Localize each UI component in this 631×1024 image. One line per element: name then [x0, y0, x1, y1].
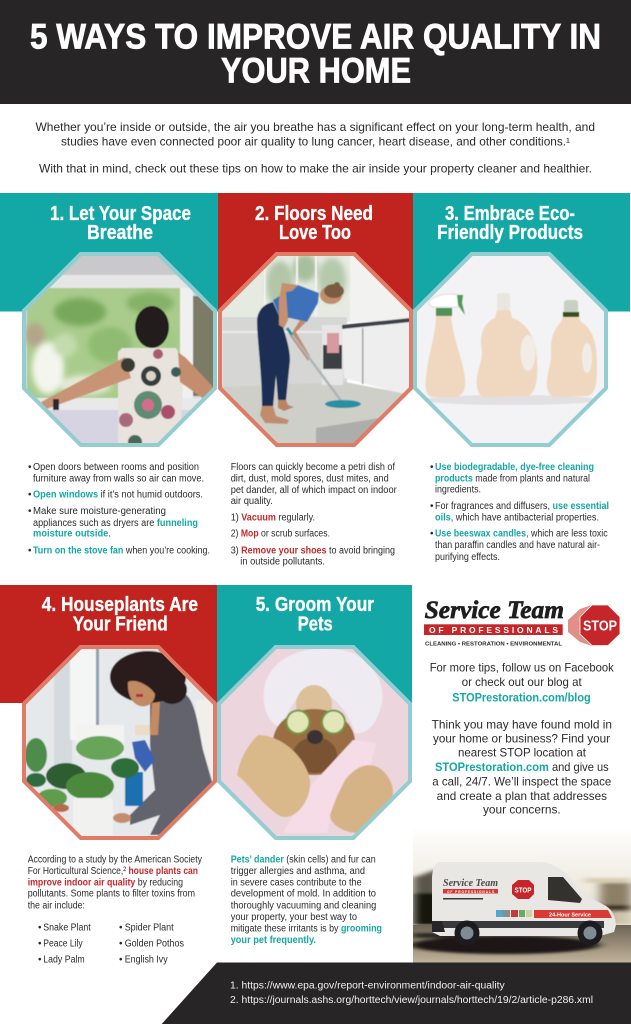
text: tip 4 houseplants: the air include:	[28, 901, 85, 912]
text: tip 1 bullets: •	[28, 506, 32, 517]
text: call to action: or check out our blog at	[462, 676, 582, 689]
photo: eco-friendly bottles	[413, 252, 608, 447]
text: tip 3 bullets: •	[430, 529, 434, 540]
intro text: With that in mind, check out these tips on how to make the air inside your property cleaner and healthier.	[39, 163, 592, 176]
heading: tip 5: 5. Groom Your	[256, 594, 374, 616]
text: call to action: STOPrestoration.com/blog	[452, 692, 591, 705]
van body: Service Team	[443, 878, 498, 889]
text: tip 2 steps: pet dander, all of which impact on indoor	[231, 485, 397, 496]
plant list: Peace Lily	[43, 939, 83, 950]
title banner	[0, 0, 631, 104]
plant list: •	[38, 955, 42, 966]
panel: tip 3 embrace eco-friendly products	[413, 193, 630, 312]
text: tip 1 bullets: •	[28, 490, 32, 501]
heading: tip 1: 1. Let Your Space	[50, 203, 191, 225]
intro text: Whether you’re inside or outside, the air you breathe has a significant effect on your long-term health, and	[36, 121, 595, 134]
text: tip 5 pets: Pets’ dander (skin cells) and fur can	[231, 855, 376, 866]
text: tip 3 bullets: Use beeswax candles, which are less toxic	[435, 529, 608, 540]
text: tip 5 pets: your pet frequently.	[231, 935, 316, 946]
heading: tip 1: Breathe	[87, 222, 153, 244]
text: tip 1 bullets: Open windows if it’s not humid outdoors.	[33, 490, 203, 501]
text: tip 1 bullets: appliances such as dryers are funneling	[33, 518, 198, 529]
text: tip 1 bullets: furniture away from walls so air can move.	[33, 474, 204, 484]
text: tip 3 bullets: For fragrances and diffusers, use essential	[435, 501, 609, 512]
heading: tip 1	[50, 203, 191, 244]
photo: woman mopping floor	[218, 252, 413, 450]
text: tip 4 houseplants: pollutants. Some plants to filter toxins from	[28, 889, 195, 900]
footer references: 2. https://journals.ashs.org/horttech/view/journals/horttech/19/2/article-p286.xml	[230, 995, 593, 1006]
text: tip 4 houseplants	[28, 855, 202, 966]
text: tip 1 bullets: Open doors between rooms and position	[33, 462, 199, 473]
panel: tip 4 houseplants	[0, 585, 217, 703]
text: tip 5 pets: thoroughly vacuuming and cleaning	[231, 901, 376, 912]
text: tip 1 bullets: moisture outside.	[33, 529, 111, 540]
plant list: Spider Plant	[125, 923, 174, 934]
text: tip 2 steps: 1) Vacuum regularly.	[231, 513, 315, 524]
plant list	[38, 923, 184, 966]
plant list: •	[119, 923, 123, 934]
text: tip 3 bullets: Use biodegradable, dye-free cleaning	[435, 462, 594, 473]
text: call to action: Think you may have found mold in	[432, 719, 612, 732]
icon: stop sign	[568, 605, 620, 646]
text: tip 3 bullets: than paraffin candles and have natural air-	[435, 540, 600, 551]
photo: dog with towel and cucumber eye masks	[217, 645, 412, 840]
logo: Service Team of Professionals STOP	[424, 597, 620, 647]
heading: tip 2	[255, 203, 373, 244]
intro text	[36, 121, 595, 176]
text: call to action: your concerns.	[483, 804, 561, 817]
plant list: •	[119, 939, 123, 950]
van body	[432, 862, 616, 946]
text: tip 5 pets: mitigate these irritants is by grooming	[231, 924, 382, 935]
text: call to action: For more tips, follow us on Facebook	[430, 662, 614, 675]
photo: woman opening window	[22, 252, 217, 449]
plant list: •	[38, 939, 42, 950]
text: tip 2 steps: in outside pollutants.	[240, 557, 325, 568]
text: tip 1 bullets	[28, 462, 210, 557]
text: tip 5 pets: trigger allergies and asthma, and	[231, 866, 365, 877]
text: tip 2 steps: Floors can quickly become a petri dish of	[231, 462, 395, 473]
panel: tip 5 groom your pets	[217, 585, 412, 703]
photo: woman watering houseplants	[22, 645, 217, 840]
text: tip 1 bullets: Make sure moisture-generating	[33, 506, 166, 517]
text: tip 5 pets	[231, 855, 382, 946]
plant list: Lady Palm	[43, 955, 85, 966]
heading: tip 4	[42, 594, 198, 636]
text: tip 3 bullets: •	[430, 501, 434, 512]
logo: Service Team of Professionals STOP: Service Team	[425, 597, 564, 624]
van body: 24-Hour Service	[549, 912, 591, 918]
text: tip 5 pets: your property, your best way to	[231, 912, 357, 923]
text: tip 2 steps	[231, 462, 397, 568]
text: tip 5 pets: development of mold. In addition to	[231, 889, 376, 900]
heading: tip 3	[437, 203, 583, 244]
logo: Service Team of Professionals STOP: OF PROFESSIONALS	[429, 625, 558, 635]
heading: tip 2: 2. Floors Need	[255, 203, 373, 225]
text: tip 4 houseplants: For Horticultural Science,² house plants can	[28, 866, 198, 877]
icon: stop sign: STOP	[583, 618, 617, 634]
text: tip 3 bullets: purifying effects.	[435, 552, 500, 563]
text: tip 1 bullets: •	[28, 462, 32, 473]
van body: OF PROFESSIONALS	[447, 890, 494, 894]
text: tip 2 steps: air quality.	[231, 496, 273, 507]
photo: STOP service van	[413, 842, 631, 962]
text: tip 3 bullets: products made from plants and natural	[435, 474, 590, 484]
heading: tip 3: 3. Embrace Eco-	[445, 203, 575, 225]
text: call to action: a call, 24/7. We’ll inspect the space	[432, 776, 611, 789]
footer references	[162, 962, 631, 1024]
text: tip 3 bullets: •	[430, 462, 434, 473]
intro text: studies have even connected poor air quality to lung cancer, heart disease, and other conditions.¹	[61, 136, 570, 149]
text: call to action: your home or business? Find your	[433, 733, 610, 746]
text: tip 2 steps: 2) Mop or scrub surfaces.	[231, 529, 330, 540]
text: call to action: STOPrestoration.com and give us	[435, 761, 609, 774]
logo: Service Team of Professionals STOP: CLEANING • RESTORATION • ENVIRONMENTAL	[425, 641, 563, 647]
text: call to action	[430, 662, 614, 817]
plants	[25, 736, 139, 807]
panel: tip 2 floors need love too	[218, 193, 413, 312]
text: tip 3 bullets: oils, which have antibacterial properties.	[435, 513, 599, 524]
text: call to action: nearest STOP location at	[458, 747, 587, 760]
text: tip 3 bullets: ingredients.	[435, 485, 481, 496]
heading: tip 5	[256, 594, 374, 636]
footer references: 1. https://www.epa.gov/report-environment/indoor-air-quality	[230, 980, 505, 991]
plant list: English Ivy	[125, 955, 168, 966]
heading: tip 5: Pets	[298, 614, 333, 636]
heading: tip 4: 4. Houseplants Are	[42, 594, 198, 616]
text: call to action: and create a plan that addresses	[437, 790, 607, 803]
panel: tip 1 let your space breathe	[0, 193, 218, 312]
title banner: YOUR HOME	[221, 52, 411, 90]
text: tip 1 bullets: Turn on the stove fan when you’re cooking.	[33, 546, 210, 557]
text: tip 4 houseplants: improve indoor air quality by reducing	[28, 878, 183, 889]
heading: tip 4: Your Friend	[73, 614, 168, 636]
text: tip 5 pets: in severe cases contribute to the	[231, 878, 362, 889]
heading: tip 3: Friendly Products	[437, 222, 583, 244]
text: tip 3 bullets	[430, 462, 609, 563]
plant list: Snake Plant	[43, 923, 91, 934]
heading: tip 2: Love Too	[279, 222, 351, 244]
plant list: •	[38, 923, 42, 934]
text: tip 2 steps: dirt, dust, mold spores, dust mites, and	[231, 474, 389, 484]
plant list: Golden Pothos	[125, 939, 184, 950]
plant list: •	[119, 955, 123, 966]
text: tip 2 steps: 3) Remove your shoes to avoid bringing	[231, 546, 395, 557]
text: tip 4 houseplants: According to a study by the American Society	[28, 855, 202, 866]
van body: STOP	[514, 888, 532, 894]
text: tip 1 bullets: •	[28, 546, 32, 557]
van wheels	[454, 920, 602, 946]
